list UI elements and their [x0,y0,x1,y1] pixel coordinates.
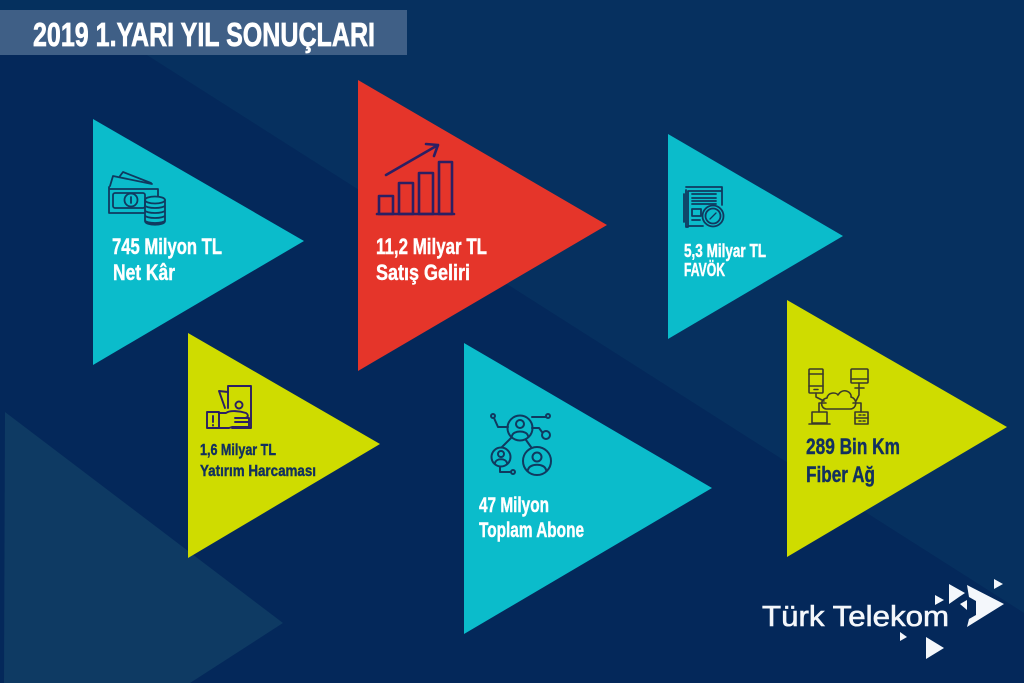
icon: connected user network [491,414,551,475]
icon: document with percent seal [684,187,724,227]
icon: hand holding banknotes [207,386,251,428]
panel: capital expenditure [188,333,380,558]
text: EBITDA: 5,3 Milyar TL [684,241,766,261]
logo: Türk Telekom: Türk Telekom [762,601,949,633]
panel: total subscribers [464,343,712,634]
text: net profit: Net Kâr [113,260,175,285]
text: fiber network [806,434,900,487]
title: 2019 1.YARI YIL SONUÇLARI [33,16,375,53]
text: total subscribers: Toplam Abone [479,519,584,542]
panel: net profit [93,119,304,365]
text: capital expenditure: 1,6 Milyar TL [200,442,276,459]
text: EBITDA: FAVÖK [684,260,725,280]
text: fiber network: Fiber Ağ [806,462,875,487]
text: net profit [112,234,222,285]
text: sales revenue: Satış Geliri [376,260,470,285]
text: capital expenditure: Yatırım Harcaması [200,463,316,480]
text: sales revenue [376,234,487,285]
icon: rising bar chart [377,144,454,214]
icon: money and coins [109,172,165,225]
panel: fiber network [787,300,1007,557]
text: total subscribers [479,494,584,542]
text: total subscribers: 47 Milyon [479,494,549,517]
logo triangles [900,579,1004,659]
text: net profit: 745 Milyon TL [112,234,222,259]
text: fiber network: 289 Bin Km [806,434,900,459]
logo: Türk Telekom [762,579,1004,659]
text: EBITDA [684,241,766,280]
text: sales revenue: 11,2 Milyar TL [376,234,487,259]
title bar [0,10,407,55]
panel: sales revenue [358,80,607,371]
icon: cloud network [809,369,868,424]
background triangle [4,412,283,683]
text: capital expenditure [200,442,316,480]
panel: EBITDA [668,134,843,339]
